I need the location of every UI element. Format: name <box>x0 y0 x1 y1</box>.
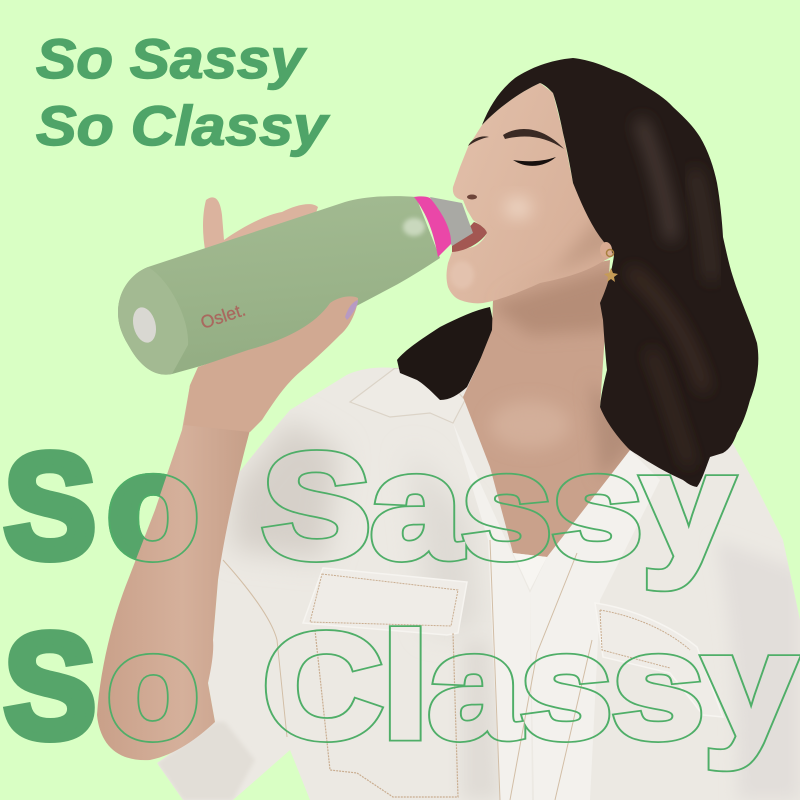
left placket <box>453 423 532 800</box>
model: fingers behind bottle <box>203 197 318 262</box>
solid large letters behind the model: S <box>4 424 96 589</box>
model: closed eye with eyeliner <box>513 157 556 166</box>
model: earring <box>600 242 618 282</box>
left chest pocket <box>303 568 467 797</box>
model: eyebrow <box>468 129 564 149</box>
bottle base rim shading <box>118 267 188 375</box>
right placket <box>530 450 660 800</box>
solid large letters behind the model: o <box>107 424 199 589</box>
model: hair <box>482 58 758 487</box>
shirt collar <box>350 368 465 423</box>
model: left hair lock <box>397 307 495 400</box>
small title: So Sassy <box>36 27 307 90</box>
model: neck and chest <box>463 260 630 557</box>
right chest pocket <box>595 603 723 717</box>
model: arm <box>97 385 268 760</box>
small title <box>36 27 330 157</box>
solid large letters behind the model: o <box>107 604 199 769</box>
solid large letters behind the model: S <box>4 604 96 769</box>
solid large letters behind the model <box>4 424 199 769</box>
bottle logo: Oslet. <box>198 300 248 333</box>
thumb nail <box>345 300 358 320</box>
bottle base disc <box>129 305 160 345</box>
model: lips <box>452 222 487 252</box>
small title: So Classy <box>36 94 330 157</box>
model: face <box>446 83 614 304</box>
model: shirt <box>150 360 800 800</box>
bottle steel cap <box>430 197 473 246</box>
bottle highlight <box>403 218 425 236</box>
model: nostril <box>467 194 477 200</box>
bottle <box>118 196 473 375</box>
model: undershirt <box>513 553 547 590</box>
bottle pink band <box>414 196 451 257</box>
sleeve and placket seams <box>223 540 592 800</box>
large outlined lettering <box>108 449 800 772</box>
model: hand gripping bottle <box>184 296 358 432</box>
